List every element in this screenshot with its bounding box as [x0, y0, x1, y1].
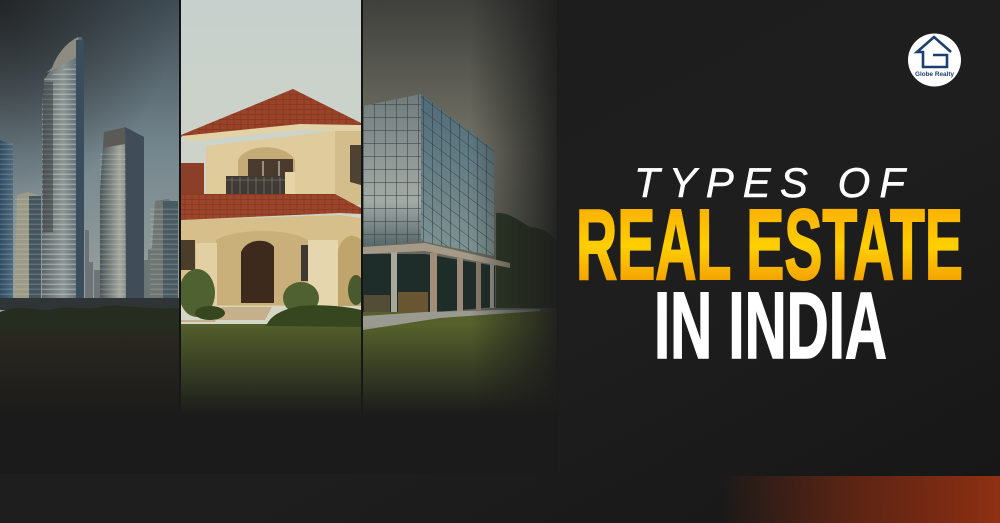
fade: right edge	[470, 0, 558, 420]
balcony	[218, 172, 306, 197]
heading line: TYPES OF: TYPES OF	[634, 159, 907, 206]
sky	[363, 0, 557, 340]
panel: residential towers	[0, 0, 179, 414]
side facade	[421, 94, 494, 256]
tower: tall curved	[42, 37, 84, 305]
trees	[496, 213, 557, 308]
right arch	[338, 236, 361, 306]
steps	[181, 307, 272, 322]
floor slab	[363, 243, 510, 268]
tower: far left	[0, 140, 13, 303]
door	[241, 241, 274, 303]
tower: mid right	[100, 127, 144, 305]
pavement	[363, 309, 540, 330]
divider: panel 1-2	[179, 0, 181, 420]
low roof left	[181, 163, 204, 194]
bushes	[0, 306, 179, 340]
tower: right	[148, 199, 178, 305]
left window	[181, 240, 195, 270]
panel: house	[179, 0, 364, 414]
main roof	[181, 89, 361, 141]
divider: panel 2-3	[361, 0, 363, 420]
fade: top-left vignette	[0, 0, 179, 200]
shrubs	[179, 269, 364, 327]
lower roof	[181, 194, 361, 220]
columns	[196, 240, 338, 308]
arched window	[238, 147, 295, 177]
upper walls	[206, 131, 361, 205]
porch arch	[216, 231, 308, 305]
panel: commercial building	[363, 0, 558, 420]
fade: panels into dark bottom	[0, 325, 558, 415]
logo: Globe Realty	[908, 34, 961, 86]
dark fill under panels	[0, 414, 558, 474]
tower: small left	[15, 192, 41, 300]
lawn	[363, 312, 557, 414]
logo text: Globe Realty	[915, 71, 954, 78]
sky	[181, 0, 361, 340]
lower ground	[0, 334, 179, 414]
heading: title	[576, 159, 963, 379]
logo disc	[908, 34, 961, 86]
side window	[350, 145, 361, 185]
background buildings	[85, 230, 152, 305]
front facade	[363, 94, 421, 247]
ground floor walls	[181, 215, 361, 306]
accent: red glow bottom right	[720, 476, 1000, 523]
sky	[0, 0, 179, 340]
icon: house G	[917, 37, 951, 67]
tower base	[0, 298, 179, 310]
ground floor glass	[363, 252, 495, 315]
lawn	[181, 324, 361, 414]
